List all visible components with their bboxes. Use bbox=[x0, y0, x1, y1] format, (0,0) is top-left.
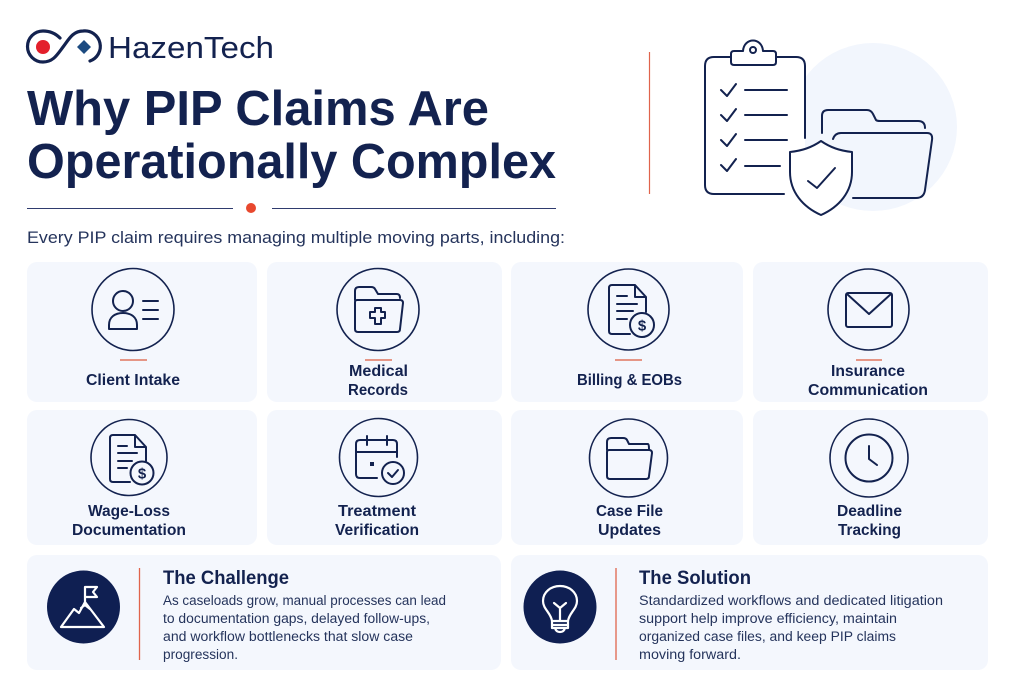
panel: Deadline Tracking bbox=[753, 410, 988, 545]
text block: challenge body: progression. bbox=[163, 647, 238, 662]
logo: HazenTech: HazenTech bbox=[108, 30, 274, 65]
panel: Medical Records bbox=[267, 262, 502, 402]
panel: Deadline Tracking: Deadline bbox=[837, 503, 902, 520]
panel: Wage-Loss Documentation: Documentation bbox=[72, 522, 186, 539]
vertical accent line bbox=[648, 52, 650, 194]
text block: challenge body: As caseloads grow, manual processes can lead bbox=[163, 593, 446, 608]
panel: Deadline Tracking: Tracking bbox=[838, 522, 901, 539]
panel: Case File Updates: Case File bbox=[596, 503, 663, 520]
title: Operationally Complex bbox=[27, 135, 556, 189]
panel: Insurance Communication: Insurance bbox=[831, 363, 905, 380]
panel: Treatment Verification bbox=[267, 410, 502, 545]
icon: light bulb bbox=[524, 570, 596, 644]
illustration: clipboard, folder and shield bbox=[705, 40, 957, 215]
panel: Case File Updates: Updates bbox=[598, 522, 661, 539]
panel: Insurance Communication bbox=[753, 262, 988, 402]
panel: Client Intake: Client Intake bbox=[86, 372, 180, 389]
panel: Insurance Communication: Communication bbox=[808, 382, 928, 399]
panel: The Challenge bbox=[27, 555, 501, 670]
text block: challenge body: and workflow bottlenecks that slow case bbox=[163, 629, 413, 644]
panel: Medical Records: Records bbox=[348, 382, 408, 399]
logo: HazenTech bbox=[28, 30, 274, 65]
panel: Medical Records: Medical bbox=[349, 363, 408, 380]
icon: document with dollar coin: $ bbox=[138, 466, 147, 482]
icon: folder bbox=[590, 419, 668, 497]
panel: The Solution: The Solution bbox=[639, 568, 751, 589]
panel: Treatment Verification: Verification bbox=[335, 522, 419, 539]
panel: Billing & EOBs bbox=[511, 262, 743, 402]
icon: invoice with dollar coin: $ bbox=[638, 318, 647, 334]
icon: mountain with flag bbox=[47, 570, 120, 644]
subtitle: Every PIP claim requires managing multiple moving parts, including: bbox=[27, 228, 565, 247]
text block: challenge body bbox=[163, 593, 446, 662]
icon: invoice with dollar coin bbox=[588, 269, 669, 350]
text block: solution body: organized case files, and keep PIP claims bbox=[639, 629, 896, 644]
panel: The Challenge: The Challenge bbox=[163, 568, 289, 589]
text block: solution body: moving forward. bbox=[639, 647, 741, 662]
icon: envelope bbox=[828, 269, 909, 350]
text block: solution body: support help improve efficiency, maintain bbox=[639, 611, 897, 626]
title bbox=[27, 82, 556, 189]
panel: Wage-Loss Documentation: Wage-Loss bbox=[88, 503, 170, 520]
divider with red dot bbox=[27, 203, 556, 213]
icon: clock bbox=[830, 419, 908, 497]
panel: The Solution bbox=[511, 555, 988, 670]
panel: Treatment Verification: Treatment bbox=[338, 503, 417, 520]
text block: solution body bbox=[639, 593, 943, 662]
panel: Wage-Loss Documentation bbox=[27, 410, 257, 545]
title: Why PIP Claims Are bbox=[27, 82, 489, 136]
text block: challenge body: to documentation gaps, delayed follow-ups, bbox=[163, 611, 430, 626]
icon: person with lines bbox=[92, 268, 174, 350]
icon: medical folder bbox=[337, 268, 419, 350]
icon: document with dollar coin bbox=[91, 420, 167, 496]
icon: calendar with check bbox=[340, 418, 418, 496]
panel: Billing & EOBs: Billing & EOBs bbox=[577, 372, 682, 389]
panel: Case File Updates bbox=[511, 410, 743, 545]
panel: Client Intake bbox=[27, 262, 257, 402]
text block: solution body: Standardized workflows and dedicated litigation bbox=[639, 593, 943, 608]
